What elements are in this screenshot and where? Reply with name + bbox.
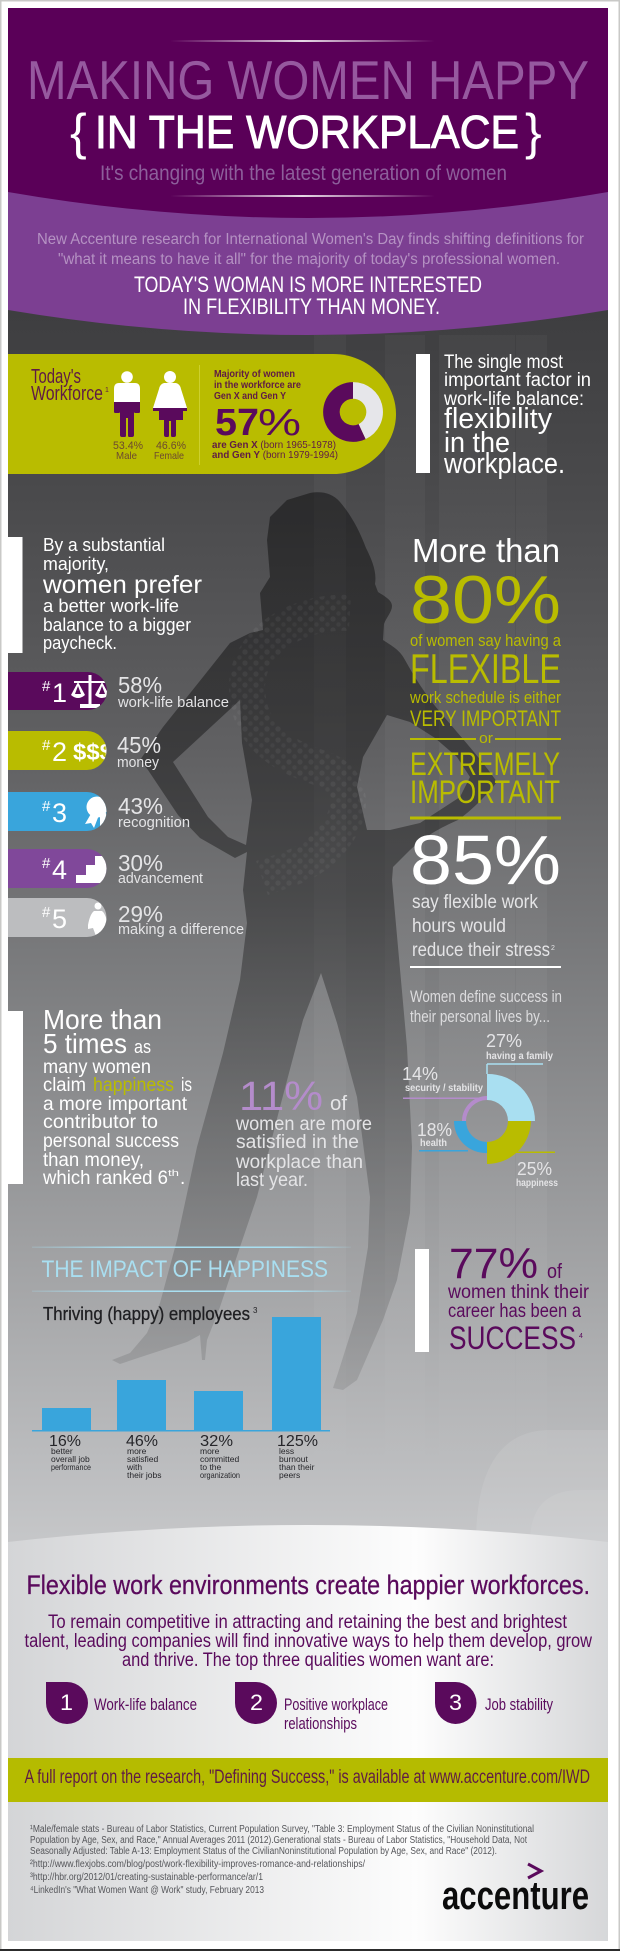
- callout: 77% success: 77%: [449, 1240, 538, 1288]
- workforce heading: Today's: [31, 366, 81, 388]
- rank 5: making a difference: [8, 898, 244, 938]
- footnotes: ¹Male/female stats - Bureau of Labor Statistics, Current Population Survey, "Table 3: Employment Status of the Civilian Noninstitutional: [30, 1824, 534, 1835]
- bar label: 46%: their jobs: [127, 1470, 162, 1480]
- segment: 18% health: 18%: [417, 1120, 452, 1140]
- intro text: "what it means to have it all" for the majority of today's professional women.: [58, 251, 560, 268]
- callout: women prefer: a better work-life: [43, 596, 179, 616]
- segment: 14% security / stability: [402, 1064, 487, 1121]
- rank 3: recognition: [8, 792, 190, 831]
- rank 1: work-life balance: 58%: [118, 672, 162, 698]
- rank 1: work-life balance: 1: [52, 678, 67, 708]
- callout: women prefer: majority,: [43, 554, 109, 574]
- callout: more than 5 times: a more important: [43, 1094, 188, 1115]
- rank 2: money: money: [117, 755, 160, 771]
- callout: more than 5 times: contributor to: [43, 1112, 158, 1133]
- heading: women define success: Women define success in: [410, 988, 562, 1006]
- intro text: New Accenture research for International Women's Day finds shifting definitions for: [37, 231, 584, 248]
- stat block: 11% more satisfied: [235, 1073, 372, 1191]
- heading: women define success: their personal lives by...: [410, 1008, 550, 1026]
- paragraph: [24, 1612, 592, 1671]
- stat block: 80% flexible schedule: FLEXIBLE: [410, 645, 561, 692]
- logo: accenture: [442, 1864, 589, 1918]
- bar label: 16%: performance: [51, 1462, 91, 1472]
- quality 2: Positive workplace: [284, 1696, 388, 1714]
- bar label: 125%: peers: [279, 1470, 300, 1480]
- icon: ribbon: [85, 796, 108, 828]
- workforce heading: 1: [105, 387, 109, 394]
- icon: woman figure: [88, 902, 106, 935]
- male label: Male: [116, 450, 137, 462]
- bar label: 125%: less: [279, 1446, 294, 1456]
- callout: women prefer: By a substantial: [43, 535, 165, 555]
- quality 3: 3: [449, 1690, 462, 1715]
- segment: 27% having a family: 27%: [486, 1031, 522, 1051]
- stat block: 80% flexible schedule: of women say having a: [410, 631, 561, 650]
- stat block: 80% flexible schedule: VERY IMPORTANT: [410, 706, 561, 731]
- callout: more than 5 times: claim: [43, 1075, 86, 1096]
- female label: 46.6%: [156, 440, 186, 452]
- bar label: 32%: 32%: [200, 1433, 233, 1450]
- footnotes: Seasonally Adjusted: Table A-13: Employment Status of the CivilianNoninstitutional Population by Age, Sex, and Race" (2012).: [30, 1846, 497, 1857]
- callout: more than 5 times: is: [181, 1075, 192, 1096]
- callout: flexibility in the workplace: important factor in: [444, 370, 591, 391]
- title line 2: {: [70, 104, 87, 160]
- rank 1: work-life balance: #: [42, 678, 51, 695]
- female label: [154, 440, 186, 462]
- stat block: 85% reduce stress: 85%: [410, 821, 561, 899]
- quality 1: [46, 1682, 197, 1724]
- generation text: Gen X and Gen Y: [214, 390, 286, 402]
- stat block: 11% more satisfied: women are more: [235, 1114, 372, 1135]
- rank 4: advancement: advancement: [118, 871, 203, 887]
- callout: 77% success: of: [547, 1261, 562, 1283]
- icon: stairs: [76, 856, 106, 883]
- stat block: 80% flexible schedule: 80%: [410, 562, 561, 638]
- rank 2: money: 2: [52, 737, 67, 767]
- callout: 77% success: 4: [579, 1333, 583, 1340]
- callout: flexibility in the workplace: work-life balance:: [443, 389, 584, 410]
- callout: flexibility in the workplace: workplace.: [443, 448, 565, 480]
- bar label: 16%: [49, 1433, 91, 1472]
- callout: more than 5 times: personal success: [43, 1131, 179, 1152]
- stat block: 11% more satisfied: last year.: [236, 1170, 308, 1191]
- callout: flexibility in the workplace: in the: [444, 427, 510, 459]
- bar label: 16%: overall job: [51, 1454, 90, 1464]
- donut chart: 57%: [331, 390, 375, 434]
- footnotes: Population by Age, Sex, and Race," Annual Averages 2011 (2012).Generational stats - Bureau of Labor Statistics, "Household Data, Not: [30, 1835, 527, 1846]
- bar chart: thriving employees: [32, 1304, 330, 1480]
- callout: flexibility in the workplace: The single most: [444, 352, 564, 373]
- quality 1: Work-life balance: [94, 1696, 197, 1714]
- bars: [32, 1317, 330, 1432]
- segment: 14% security / stability: security / stability: [405, 1083, 483, 1094]
- rank 1: work-life balance: work-life balance: [117, 695, 229, 711]
- banner: full report: [8, 1758, 608, 1802]
- rank 3: recognition: recognition: [118, 815, 190, 831]
- male label: 53.4%: [113, 440, 143, 452]
- bar label: 125%: [277, 1433, 318, 1480]
- callout: women prefer: balance to a bigger: [43, 615, 191, 635]
- bar label: 32%: [200, 1433, 240, 1480]
- stat block: 85% reduce stress: 2: [551, 945, 555, 952]
- stat block: 80% flexible schedule: IMPORTANT: [410, 774, 560, 810]
- rank 5: making a difference: #: [42, 904, 51, 921]
- panel: flexible work environments: [8, 1525, 608, 1941]
- icon: male figure: [114, 371, 140, 437]
- bar label: 32%: organization: [200, 1470, 240, 1480]
- stat block: 85% reduce stress: say flexible work: [412, 892, 538, 913]
- segment: 14% security / stability: 14%: [402, 1064, 438, 1084]
- stat block: 80% flexible schedule: More than: [412, 532, 560, 569]
- rank 4: advancement: 4: [52, 855, 67, 885]
- segment: 25% happiness: happiness: [516, 1178, 558, 1189]
- paragraph: and thrive. The top three qualities women want are:: [122, 1650, 494, 1671]
- silhouette of a woman: [112, 492, 497, 1390]
- heading: the impact of happiness: THE IMPACT OF HAPPINESS: [42, 1256, 328, 1283]
- stat: 57%: [215, 402, 301, 444]
- callout: more than 5 times: [8, 1004, 192, 1189]
- rank 5: making a difference: 5: [52, 904, 67, 934]
- callout: women prefer: women prefer: [42, 571, 202, 599]
- generation birth years: and Gen Y (born 1979-1994): [212, 449, 338, 461]
- icon: female figure: [153, 371, 187, 437]
- ranking list: [8, 672, 244, 938]
- chart title: Thriving (happy) employees: [43, 1304, 250, 1324]
- callout: more than 5 times: which ranked 6: [42, 1168, 168, 1189]
- panel: today's workforce: [8, 354, 396, 474]
- stat block: 11% more satisfied: of: [330, 1093, 347, 1115]
- intro text: [37, 231, 584, 268]
- stat: 57%: %: [258, 402, 301, 444]
- bar label: 46%: satisfied: [127, 1454, 158, 1464]
- bar label: 16%: 16%: [49, 1433, 81, 1450]
- title line 2: }: [525, 104, 542, 160]
- bar label: 46%: [126, 1433, 162, 1480]
- segment: 25% happiness: 25%: [517, 1159, 552, 1179]
- quality 3: [435, 1682, 554, 1724]
- bar label: 32%: to the: [200, 1462, 222, 1472]
- generation text: [214, 368, 301, 402]
- rank 2: money: [8, 731, 161, 771]
- rank 4: advancement: [8, 849, 203, 888]
- callout: more than 5 times: More than: [43, 1004, 162, 1035]
- rank 5: making a difference: 29%: [118, 901, 163, 927]
- callout: women prefer: [8, 535, 202, 653]
- bar label: 32%: committed: [200, 1454, 239, 1464]
- generation birth years: [212, 439, 338, 461]
- rank 4: advancement: 30%: [118, 850, 163, 876]
- bar label: 125%: 125%: [277, 1433, 318, 1450]
- stat block: 11% more satisfied: satisfied in the: [236, 1132, 359, 1153]
- callout: flexibility in the workplace: flexibility: [444, 403, 552, 435]
- panel: purple intro band: [8, 150, 608, 335]
- intro headline: TODAY'S WOMAN IS MORE INTERESTED: [134, 272, 482, 297]
- callout: more than 5 times: as: [134, 1037, 151, 1057]
- callout: more than 5 times: than money,: [43, 1150, 144, 1171]
- icon: scales: [71, 675, 109, 708]
- rank 2: money: 45%: [117, 732, 161, 758]
- bar label: 46%: 46%: [126, 1433, 158, 1450]
- stat block: 85% reduce stress: [410, 821, 561, 968]
- stat block: 80% flexible schedule: work schedule is either: [409, 689, 561, 707]
- stat block: 85% reduce stress: reduce their stress: [412, 940, 550, 961]
- segment: 18% health: [417, 1120, 487, 1153]
- subtitle: It's changing with the latest generation of women: [100, 162, 507, 185]
- stat block: 80% flexible schedule: [409, 532, 561, 820]
- icon: dollar signs: $$$: [73, 739, 113, 765]
- segment: 27% having a family: having a family: [486, 1051, 553, 1062]
- bar label: 16%: better: [51, 1446, 73, 1456]
- title line 2: IN THE WORKPLACE: [95, 106, 519, 158]
- stat: 57%: 57: [215, 402, 259, 444]
- stat block: 11% more satisfied: 11%: [239, 1073, 323, 1119]
- callout: 77% success: SUCCESS: [449, 1320, 576, 1356]
- bar label: 32%: more: [200, 1446, 220, 1456]
- callout: flexibility in the workplace: [416, 352, 591, 480]
- bar label: 125%: burnout: [279, 1454, 308, 1464]
- generation birth years: are Gen X (born 1965-1978): [212, 439, 336, 451]
- rank 2: money: #: [42, 737, 51, 754]
- heading: women define success: [410, 988, 562, 1026]
- footnotes: ²http://www.flexjobs.com/blog/post/work-flexibility-improves-romance-and-relationships/: [30, 1859, 365, 1870]
- segment: 25% happiness: [487, 1121, 558, 1189]
- callout: 77% success: career has been a: [448, 1301, 581, 1322]
- stat block: 80% flexible schedule: or: [479, 730, 493, 747]
- quality 1: 1: [60, 1690, 73, 1715]
- rank 3: recognition: 3: [52, 798, 67, 828]
- callout: 77% success: women think their: [447, 1282, 590, 1303]
- quality 2: relationships: [284, 1715, 357, 1733]
- rank 5: making a difference: making a difference: [118, 922, 244, 938]
- donut chart: definitions of success: [402, 1031, 558, 1189]
- intro headline: IN FLEXIBILITY THAN MONEY.: [183, 294, 440, 319]
- callout: more than 5 times: happiness: [93, 1075, 174, 1096]
- footnotes: ⁴LinkedIn's "What Women Want @ Work" study, February 2013: [30, 1885, 264, 1896]
- chart title: 3: [253, 1306, 258, 1315]
- workforce heading: [31, 366, 109, 405]
- callout: 77% success: [415, 1240, 590, 1356]
- stat block: 80% flexible schedule: EXTREMELY: [410, 746, 560, 782]
- callout: women prefer: paycheck.: [43, 633, 117, 653]
- stat block: 85% reduce stress: hours would: [412, 916, 506, 937]
- generation text: in the workforce are: [214, 379, 301, 391]
- quality 2: 2: [250, 1690, 263, 1715]
- quality 2: [235, 1682, 388, 1733]
- rank 3: recognition: #: [42, 798, 51, 815]
- callout: more than 5 times: th: [168, 1168, 179, 1178]
- female label: Female: [154, 450, 184, 462]
- bar label: 46%: with: [126, 1462, 142, 1472]
- footnotes: ³http://hbr.org/2012/01/creating-sustainable-performance/ar/1: [30, 1872, 263, 1883]
- segment: 27% having a family: [486, 1031, 553, 1121]
- bar label: 46%: more: [127, 1446, 147, 1456]
- intro headline: [134, 272, 482, 319]
- generation text: Majority of women: [214, 368, 295, 380]
- segment: 18% health: health: [420, 1138, 447, 1149]
- rank 4: advancement: #: [42, 855, 51, 872]
- rank 1: work-life balance: [8, 672, 229, 711]
- workforce heading: Workforce: [31, 383, 103, 405]
- panel: title header: [8, 8, 608, 218]
- callout: more than 5 times: .: [180, 1168, 185, 1189]
- rank 3: recognition: 43%: [118, 793, 163, 819]
- male label: [113, 440, 143, 462]
- callout: more than 5 times: 5 times: [43, 1028, 127, 1059]
- bar label: 125%: than their: [279, 1462, 315, 1472]
- footnotes: [30, 1824, 534, 1896]
- quality 3: Job stability: [485, 1696, 554, 1714]
- callout: more than 5 times: many women: [43, 1057, 151, 1078]
- panel: dark gradient background: [8, 300, 608, 1550]
- stat block: 11% more satisfied: workplace than: [235, 1152, 363, 1173]
